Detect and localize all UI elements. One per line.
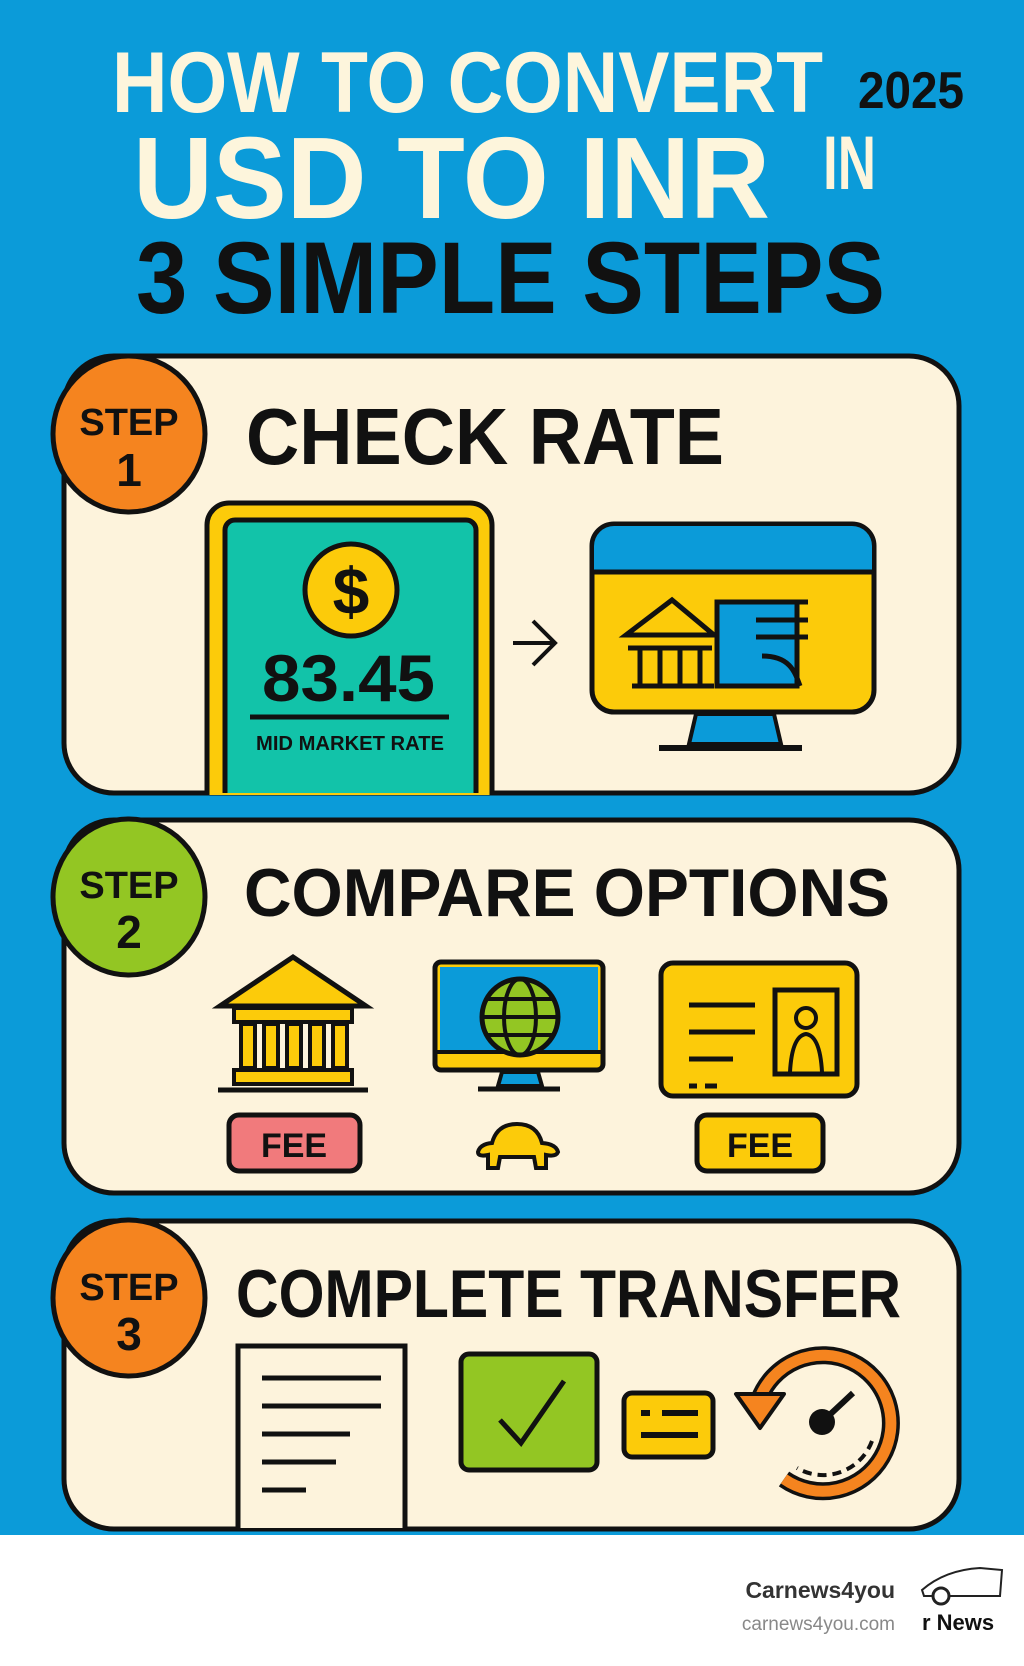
phone with rate: MID MARKET RATE (256, 733, 444, 755)
title: IN (823, 121, 876, 206)
fee tag pink (229, 1115, 360, 1171)
footer: brand (742, 1568, 1002, 1635)
panel: step 1 check rate (53, 356, 959, 795)
icon: bank (218, 957, 368, 1090)
title: 3 SIMPLE STEPS (136, 221, 885, 335)
fee tag pink: FEE (261, 1127, 327, 1165)
title (112, 35, 964, 335)
title: HOW TO CONVERT (112, 35, 823, 131)
step 1 badge (53, 356, 205, 512)
step 2 badge: 2 (116, 906, 142, 958)
icon: turtle (478, 1124, 558, 1168)
step 3 badge (53, 1220, 205, 1376)
footer: brand: carnews4you.com (742, 1614, 895, 1635)
icon: monitor with bank and rupee (592, 524, 874, 748)
arrow (513, 621, 555, 665)
fee tag yellow: FEE (727, 1127, 793, 1165)
title: 2025 (858, 62, 964, 120)
icon: monitor globe (435, 962, 603, 1089)
icon: document (238, 1346, 405, 1528)
step 2 badge: STEP (79, 865, 179, 907)
icon: clock with arrow (736, 1355, 891, 1491)
step 3 badge: STEP (79, 1267, 179, 1309)
phone with rate: 83.45 (262, 641, 435, 715)
panel: step 3 complete transfer (53, 1220, 959, 1529)
fee tag yellow (697, 1115, 823, 1171)
heading: compare options: COMPARE OPTIONS (244, 855, 890, 931)
phone with rate (207, 503, 492, 795)
step 1 badge: STEP (79, 402, 179, 444)
icon: green check (461, 1354, 597, 1470)
icon: car logo (922, 1568, 1002, 1635)
step 1 badge: 1 (116, 444, 142, 496)
heading: check rate: CHECK RATE (246, 392, 724, 481)
phone with rate: $ (333, 554, 369, 628)
footer: brand: Carnews4you (745, 1577, 895, 1603)
heading: complete transfer: COMPLETE TRANSFER (236, 1256, 901, 1332)
icon: car logo: r News (922, 1610, 994, 1635)
title: USD TO INR (133, 113, 770, 243)
step 3 badge: 3 (116, 1308, 142, 1360)
icon: small card (624, 1393, 713, 1457)
icon: id card (661, 963, 857, 1096)
step 2 badge (53, 819, 205, 975)
panel: step 2 compare options (53, 819, 959, 1193)
